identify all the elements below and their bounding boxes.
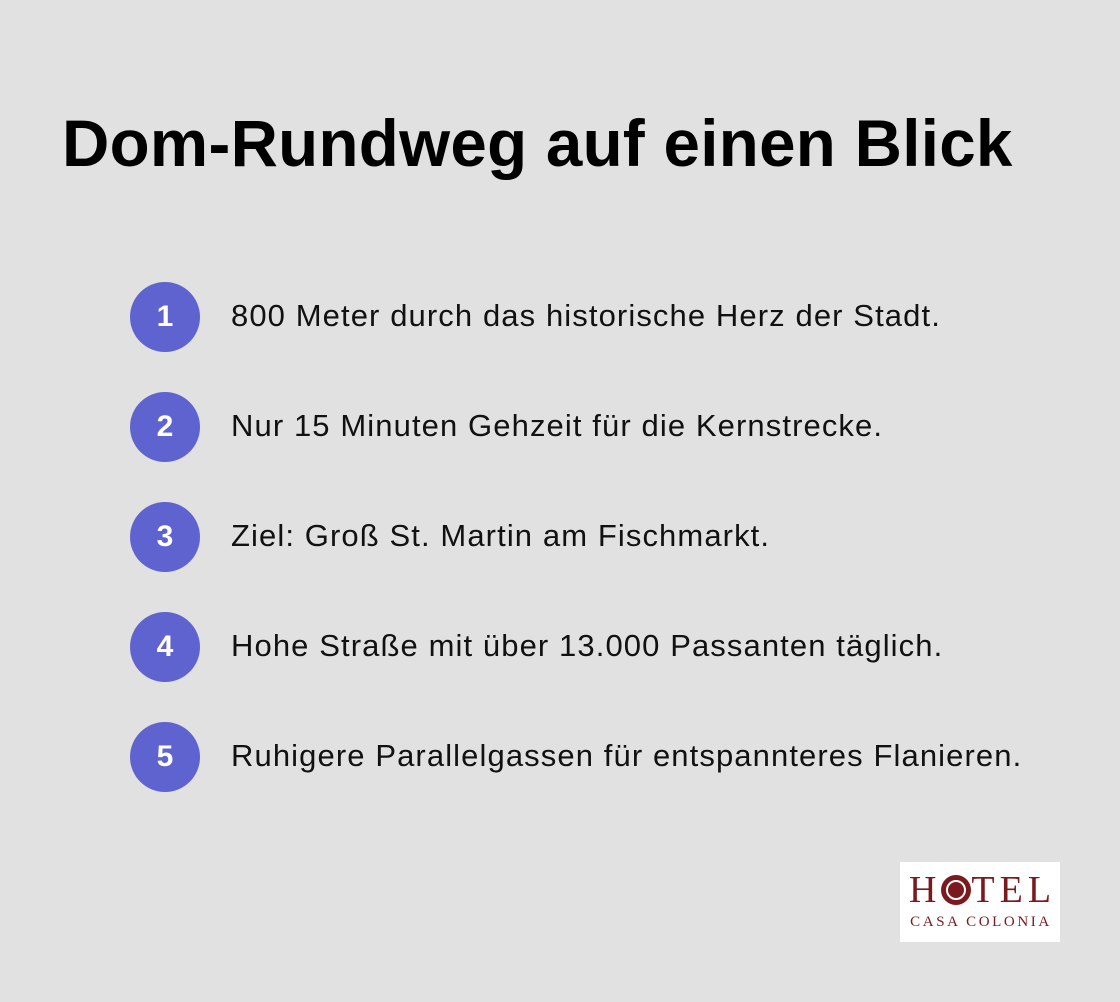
item 4 <box>130 612 943 682</box>
item 1: 800 Meter durch das historische Herz der Stadt. <box>231 298 941 333</box>
item 3 <box>130 502 770 572</box>
item 1 <box>130 282 941 352</box>
item 2: Nur 15 Minuten Gehzeit für die Kernstrecke. <box>231 408 883 443</box>
item 2 <box>130 392 883 462</box>
item 3: Ziel: Groß St. Martin am Fischmarkt. <box>231 518 770 553</box>
item 5 <box>130 722 1022 792</box>
item 5: 5 <box>157 740 173 773</box>
logo: Hotel Casa Colonia: CASA COLONIA <box>910 914 1052 930</box>
title: Dom-Rundweg auf einen Blick <box>62 107 1013 180</box>
logo: Hotel Casa Colonia: H TEL <box>909 869 1056 911</box>
item 3: 3 <box>157 520 173 553</box>
item 4: 4 <box>157 630 173 663</box>
item 1: 1 <box>157 300 173 333</box>
logo: Hotel Casa Colonia <box>900 862 1060 942</box>
item 5: Ruhigere Parallelgassen für entspannteres Flanieren. <box>231 738 1022 773</box>
item 2: 2 <box>157 410 173 443</box>
item 4: Hohe Straße mit über 13.000 Passanten täglich. <box>231 628 943 663</box>
